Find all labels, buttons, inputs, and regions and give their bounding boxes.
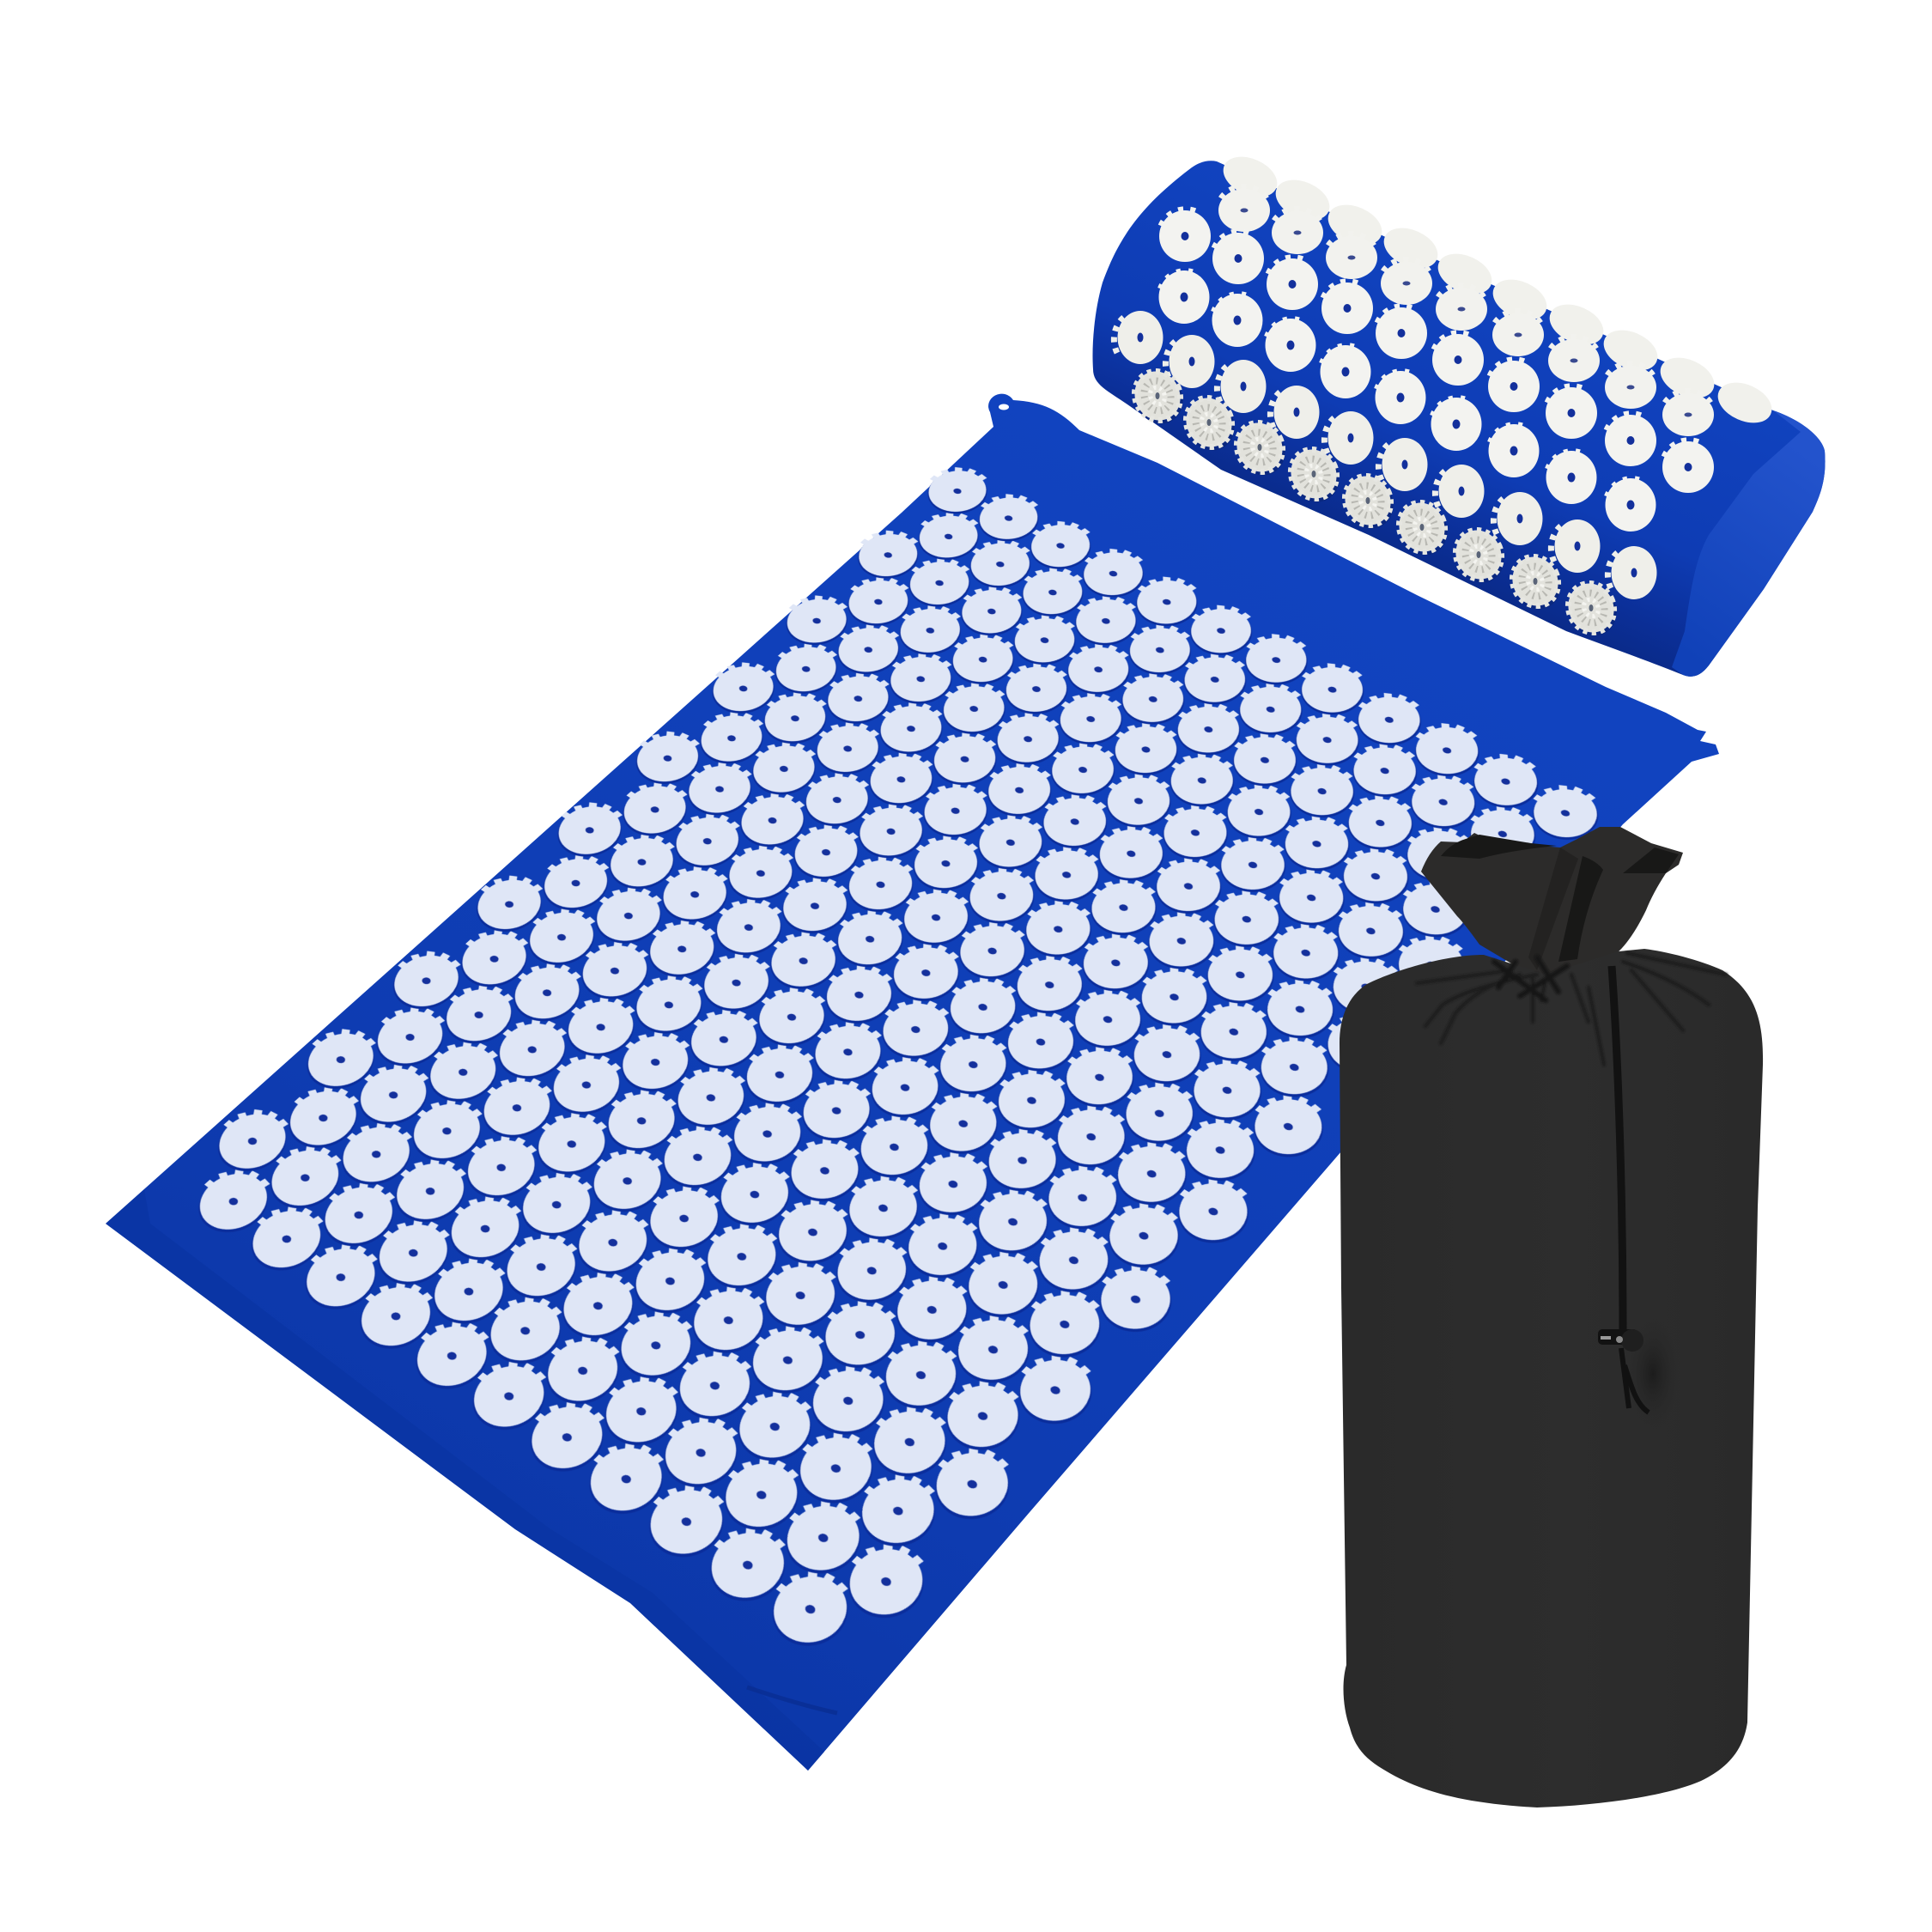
black storage bag [1340,827,1763,1807]
pillow [1092,149,1826,677]
mat fabric body [106,394,1719,1771]
mat corner crease [747,1687,837,1713]
bag main body [1340,949,1763,1807]
bag inner folds [1441,835,1679,970]
bag gathered top [1421,827,1683,979]
cord tail [1621,1348,1649,1413]
mat hanging loop [990,396,1014,416]
cord stopper toggle [1598,1329,1643,1352]
pillow body [1092,161,1826,677]
mat left fold shading [106,1189,824,1771]
pillow end cap [1672,410,1826,677]
bag drawstring cord [1612,966,1623,1329]
pillow disc rows [1114,149,1778,644]
toggle shadow [1624,1314,1682,1434]
mat spike discs grid [199,467,1599,1645]
bag gathers and wrinkles [1417,953,1726,1065]
